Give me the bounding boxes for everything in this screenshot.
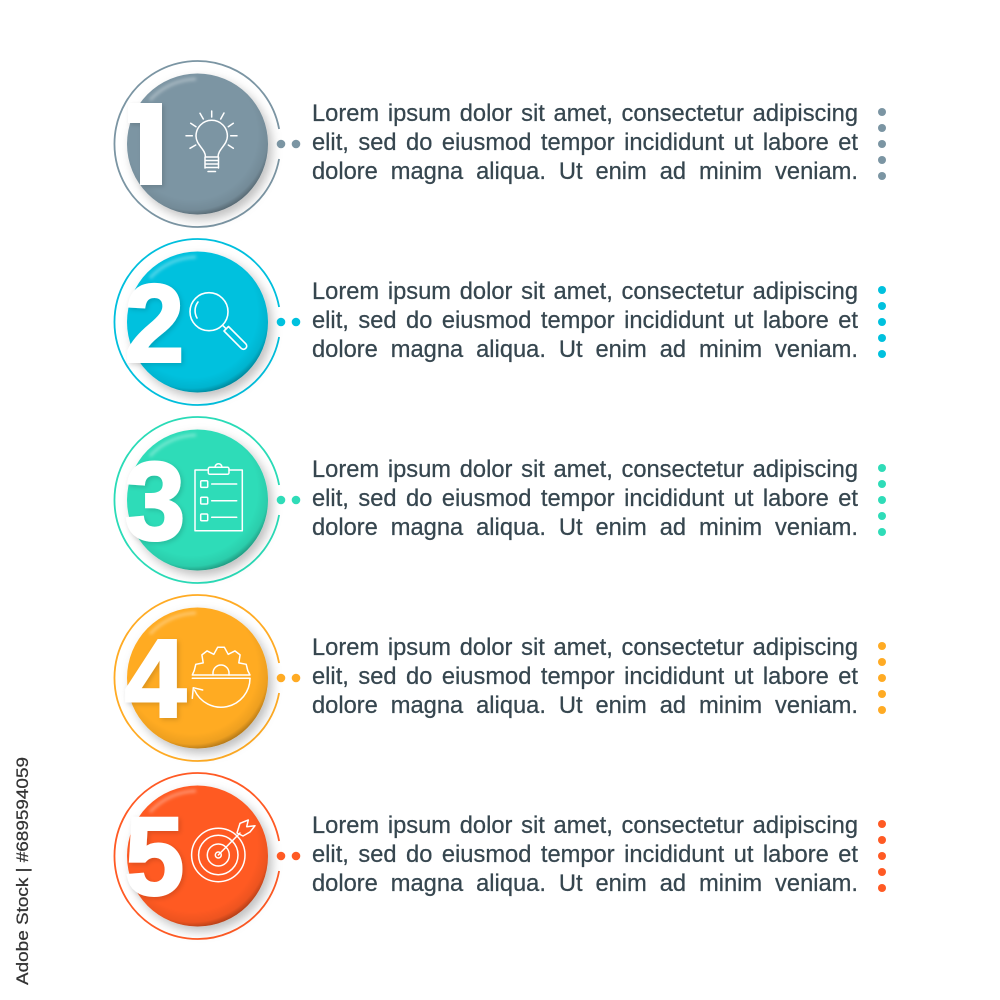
step 5 badge — [114, 773, 886, 939]
text block 2: Lorem ipsum dolor sit amet, consectetur adipiscing — [312, 279, 858, 305]
text block 1 — [312, 101, 858, 185]
text block 5: Lorem ipsum dolor sit amet, consectetur adipiscing — [312, 813, 858, 839]
text block 1: Lorem ipsum dolor sit amet, consectetur adipiscing — [312, 101, 858, 127]
number 2: 2 — [125, 262, 184, 386]
side dots — [878, 286, 886, 358]
text block 5: elit, sed do eiusmod tempor incididunt ut labore et — [312, 842, 858, 868]
disc — [127, 74, 268, 214]
step 1 badge — [114, 61, 886, 227]
number 3: 3 — [125, 440, 185, 564]
ring — [114, 417, 279, 583]
text block 2: elit, sed do eiusmod tempor incididunt ut labore et — [312, 308, 858, 334]
text block 1: dolore magna aliqua. Ut enim ad minim veniam. — [312, 159, 858, 185]
ring — [114, 239, 279, 405]
text block 2: dolore magna aliqua. Ut enim ad minim veniam. — [312, 337, 858, 363]
text block 4: Lorem ipsum dolor sit amet, consectetur adipiscing — [312, 635, 858, 661]
side dots — [878, 464, 886, 536]
ring — [114, 595, 279, 761]
disc — [127, 252, 268, 392]
text block 4 — [312, 635, 858, 719]
icon: magnifier — [190, 293, 247, 349]
icon: checklist clipboard — [195, 464, 242, 531]
side dots — [878, 820, 886, 892]
ring — [114, 61, 279, 227]
number 1: 1 — [123, 86, 187, 209]
ring — [114, 773, 279, 939]
text block 3: elit, sed do eiusmod tempor incididunt ut labore et — [312, 486, 858, 512]
connector dots — [277, 496, 300, 504]
step 4 badge — [114, 595, 886, 761]
connector dots — [277, 140, 300, 148]
disc — [127, 430, 268, 570]
number 5: 5 — [125, 796, 184, 918]
step 3 badge — [114, 417, 886, 583]
side dots — [878, 108, 886, 180]
text block 3 — [312, 457, 858, 541]
text block 4: dolore magna aliqua. Ut enim ad minim veniam. — [312, 693, 858, 719]
text block 3: Lorem ipsum dolor sit amet, consectetur adipiscing — [312, 457, 858, 483]
text block 3: dolore magna aliqua. Ut enim ad minim veniam. — [312, 515, 858, 541]
number 1 — [129, 103, 165, 188]
step 2 badge — [114, 239, 886, 405]
icon: target and arrow — [192, 820, 255, 882]
connector dots — [277, 674, 300, 682]
icon: light bulb — [186, 111, 237, 172]
text block 1: elit, sed do eiusmod tempor incididunt ut labore et — [312, 130, 858, 156]
connector dots — [277, 852, 300, 860]
icon: gear and cycle — [192, 647, 250, 707]
stock credit: Adobe Stock | #689594059 — [13, 757, 32, 985]
side dots — [878, 642, 886, 714]
disc — [127, 608, 268, 748]
text block 5: dolore magna aliqua. Ut enim ad minim veniam. — [312, 871, 858, 897]
number 4: 4 — [125, 618, 186, 740]
text block 5 — [312, 813, 858, 897]
disc — [127, 786, 268, 926]
text block 4: elit, sed do eiusmod tempor incididunt ut labore et — [312, 664, 858, 690]
text block 2 — [312, 279, 858, 363]
connector dots — [277, 318, 300, 326]
